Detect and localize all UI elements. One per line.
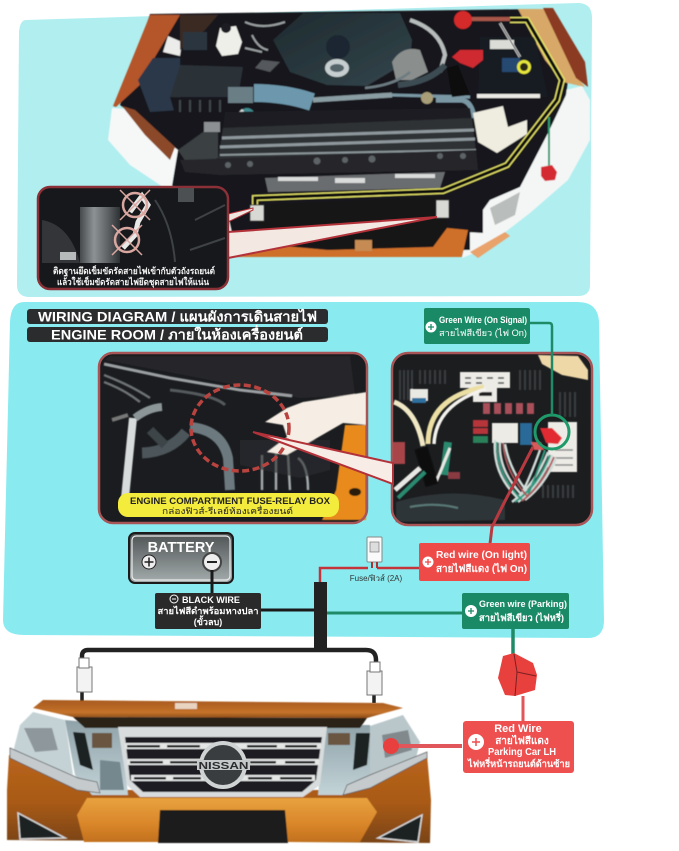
heading: wiring diagram and engine room: WIRING DIAGRAM / แผนผังการเดินสายไฟ xyxy=(38,308,317,324)
label: black wire: BLACK WIRE xyxy=(182,595,240,606)
label: red wire parking car LH: ไฟหรี่หน้ารถยนต์ด้านซ้าย xyxy=(467,756,570,770)
turbo xyxy=(392,49,428,80)
pointing hand xyxy=(265,392,367,455)
white bumper right xyxy=(462,86,590,258)
valve cover xyxy=(223,108,474,130)
white connector xyxy=(460,372,510,388)
battery: BATTERY xyxy=(148,540,215,556)
label: red wire parking car LH xyxy=(463,721,574,773)
red wire to fuse xyxy=(320,568,420,582)
intake tube xyxy=(228,87,253,103)
label: green wire parking: สายไฟสีเขียว (ไฟหรี่) xyxy=(479,610,564,624)
photo: fuse box close-up xyxy=(392,353,592,525)
black wire: battery negative xyxy=(210,570,214,594)
label: red wire parking car LH: Red Wire xyxy=(494,723,542,735)
callout pointers xyxy=(228,208,437,258)
fog lights xyxy=(18,813,65,839)
air filter box xyxy=(170,65,243,97)
license plate xyxy=(158,810,288,843)
nissan logo xyxy=(197,743,250,787)
red wire to label xyxy=(522,696,524,722)
fuse xyxy=(367,537,382,568)
green wire: on signal xyxy=(530,323,552,415)
heading: wiring diagram and engine room xyxy=(27,308,328,342)
label: black wire: (ขั้วลบ) xyxy=(194,615,222,627)
left fender xyxy=(113,15,180,107)
green wire to bulb xyxy=(511,629,515,655)
wire connector left xyxy=(77,658,92,702)
bumper band xyxy=(77,798,377,842)
left wires xyxy=(392,442,405,464)
white bumper left xyxy=(108,108,240,255)
inset caption xyxy=(53,264,215,288)
finger xyxy=(538,355,588,380)
label: fuse relay box: กล่องฟิวส์-รีเลย์ห้องเครื่องยนต์ xyxy=(162,505,293,516)
black wire to harness xyxy=(261,608,315,612)
coolant reservoir xyxy=(216,26,242,56)
inset caption: แล้วใช้เข็มขัดรัดสายไฟยึดชุดสายไฟให้แน่น xyxy=(57,275,210,288)
label: green wire on signal: Green Wire (On Signal) xyxy=(439,315,527,325)
radiator lower xyxy=(257,197,447,250)
right fender strip xyxy=(518,9,585,87)
top hoses xyxy=(245,22,285,52)
photo: engine bay xyxy=(108,8,590,258)
label: green wire parking: Green wire (Parking) xyxy=(479,599,567,610)
orange panel xyxy=(322,425,366,520)
chrome strips xyxy=(10,748,100,793)
fuse caption: Fuse/ฟิวส์ (2A) xyxy=(350,573,403,583)
label: red wire parking car LH: สายไฟสีแดง xyxy=(495,734,549,747)
label: red wire on light: Red wire (On light) xyxy=(436,550,527,561)
label: red wire parking car LH: Parking Car LH xyxy=(488,747,556,758)
vents xyxy=(73,732,93,770)
hood shadow band xyxy=(73,717,367,728)
hood xyxy=(33,700,403,718)
green wire: parking xyxy=(327,612,462,614)
harness wire xyxy=(255,20,562,212)
red connector in circle xyxy=(540,428,562,444)
panel: wiring diagram xyxy=(3,302,604,638)
green wire and red cap xyxy=(548,117,550,168)
label: black wire: สายไฟสีดำพร้อมหางปลา xyxy=(158,605,258,616)
fuses xyxy=(483,403,534,414)
label: green wire on signal: สายไฟสีเขียว (ไฟ On) xyxy=(439,328,527,338)
bay dark base xyxy=(120,9,568,252)
small box xyxy=(183,32,207,50)
green highlight circle xyxy=(535,415,569,449)
parking lamp cap xyxy=(498,653,537,696)
connectors xyxy=(250,205,264,221)
inset caption: ติดฐานยึดเข็มขัดรัดสายไฟเข้ากับตัวถังรถยนต์ xyxy=(53,264,215,277)
nissan logo: NISSAN xyxy=(198,760,248,772)
radiator cap and pipe xyxy=(421,92,433,104)
right reservoir xyxy=(473,106,527,153)
callout wedge to fuse box xyxy=(253,432,393,484)
intake hose xyxy=(254,93,312,102)
dashed fuse box circle xyxy=(191,385,289,471)
wire connector right xyxy=(367,662,382,703)
red wire: on light xyxy=(490,447,533,544)
panel: engine bay installation xyxy=(17,3,592,297)
headlights xyxy=(13,712,73,775)
photo: engine compartment xyxy=(99,353,367,523)
inset photo xyxy=(38,187,228,289)
label: green wire parking xyxy=(462,593,569,629)
engine cover xyxy=(273,13,412,86)
heading: wiring diagram and engine room: ENGINE ROOM / ภายในห้องเครื่องยนต์ xyxy=(51,324,303,342)
battery xyxy=(129,533,233,583)
label: black wire xyxy=(155,593,261,629)
harness trunk and split xyxy=(82,582,376,664)
label: fuse relay box: ENGINE COMPARTMENT FUSE-RELAY BOX xyxy=(130,496,330,506)
beige wires xyxy=(394,402,423,446)
truck body xyxy=(7,755,431,843)
label: red wire on light xyxy=(419,543,530,581)
wire bundle xyxy=(495,440,556,502)
red wire to headlight xyxy=(383,738,462,754)
label: fuse relay box xyxy=(118,493,339,517)
label: red wire on light: สายไฟสีแดง (ไฟ On) xyxy=(436,562,527,575)
grille xyxy=(118,727,327,797)
battery xyxy=(478,37,548,100)
truck front xyxy=(7,700,431,843)
chrome side areas xyxy=(65,720,128,795)
label: green wire on signal xyxy=(424,308,530,344)
